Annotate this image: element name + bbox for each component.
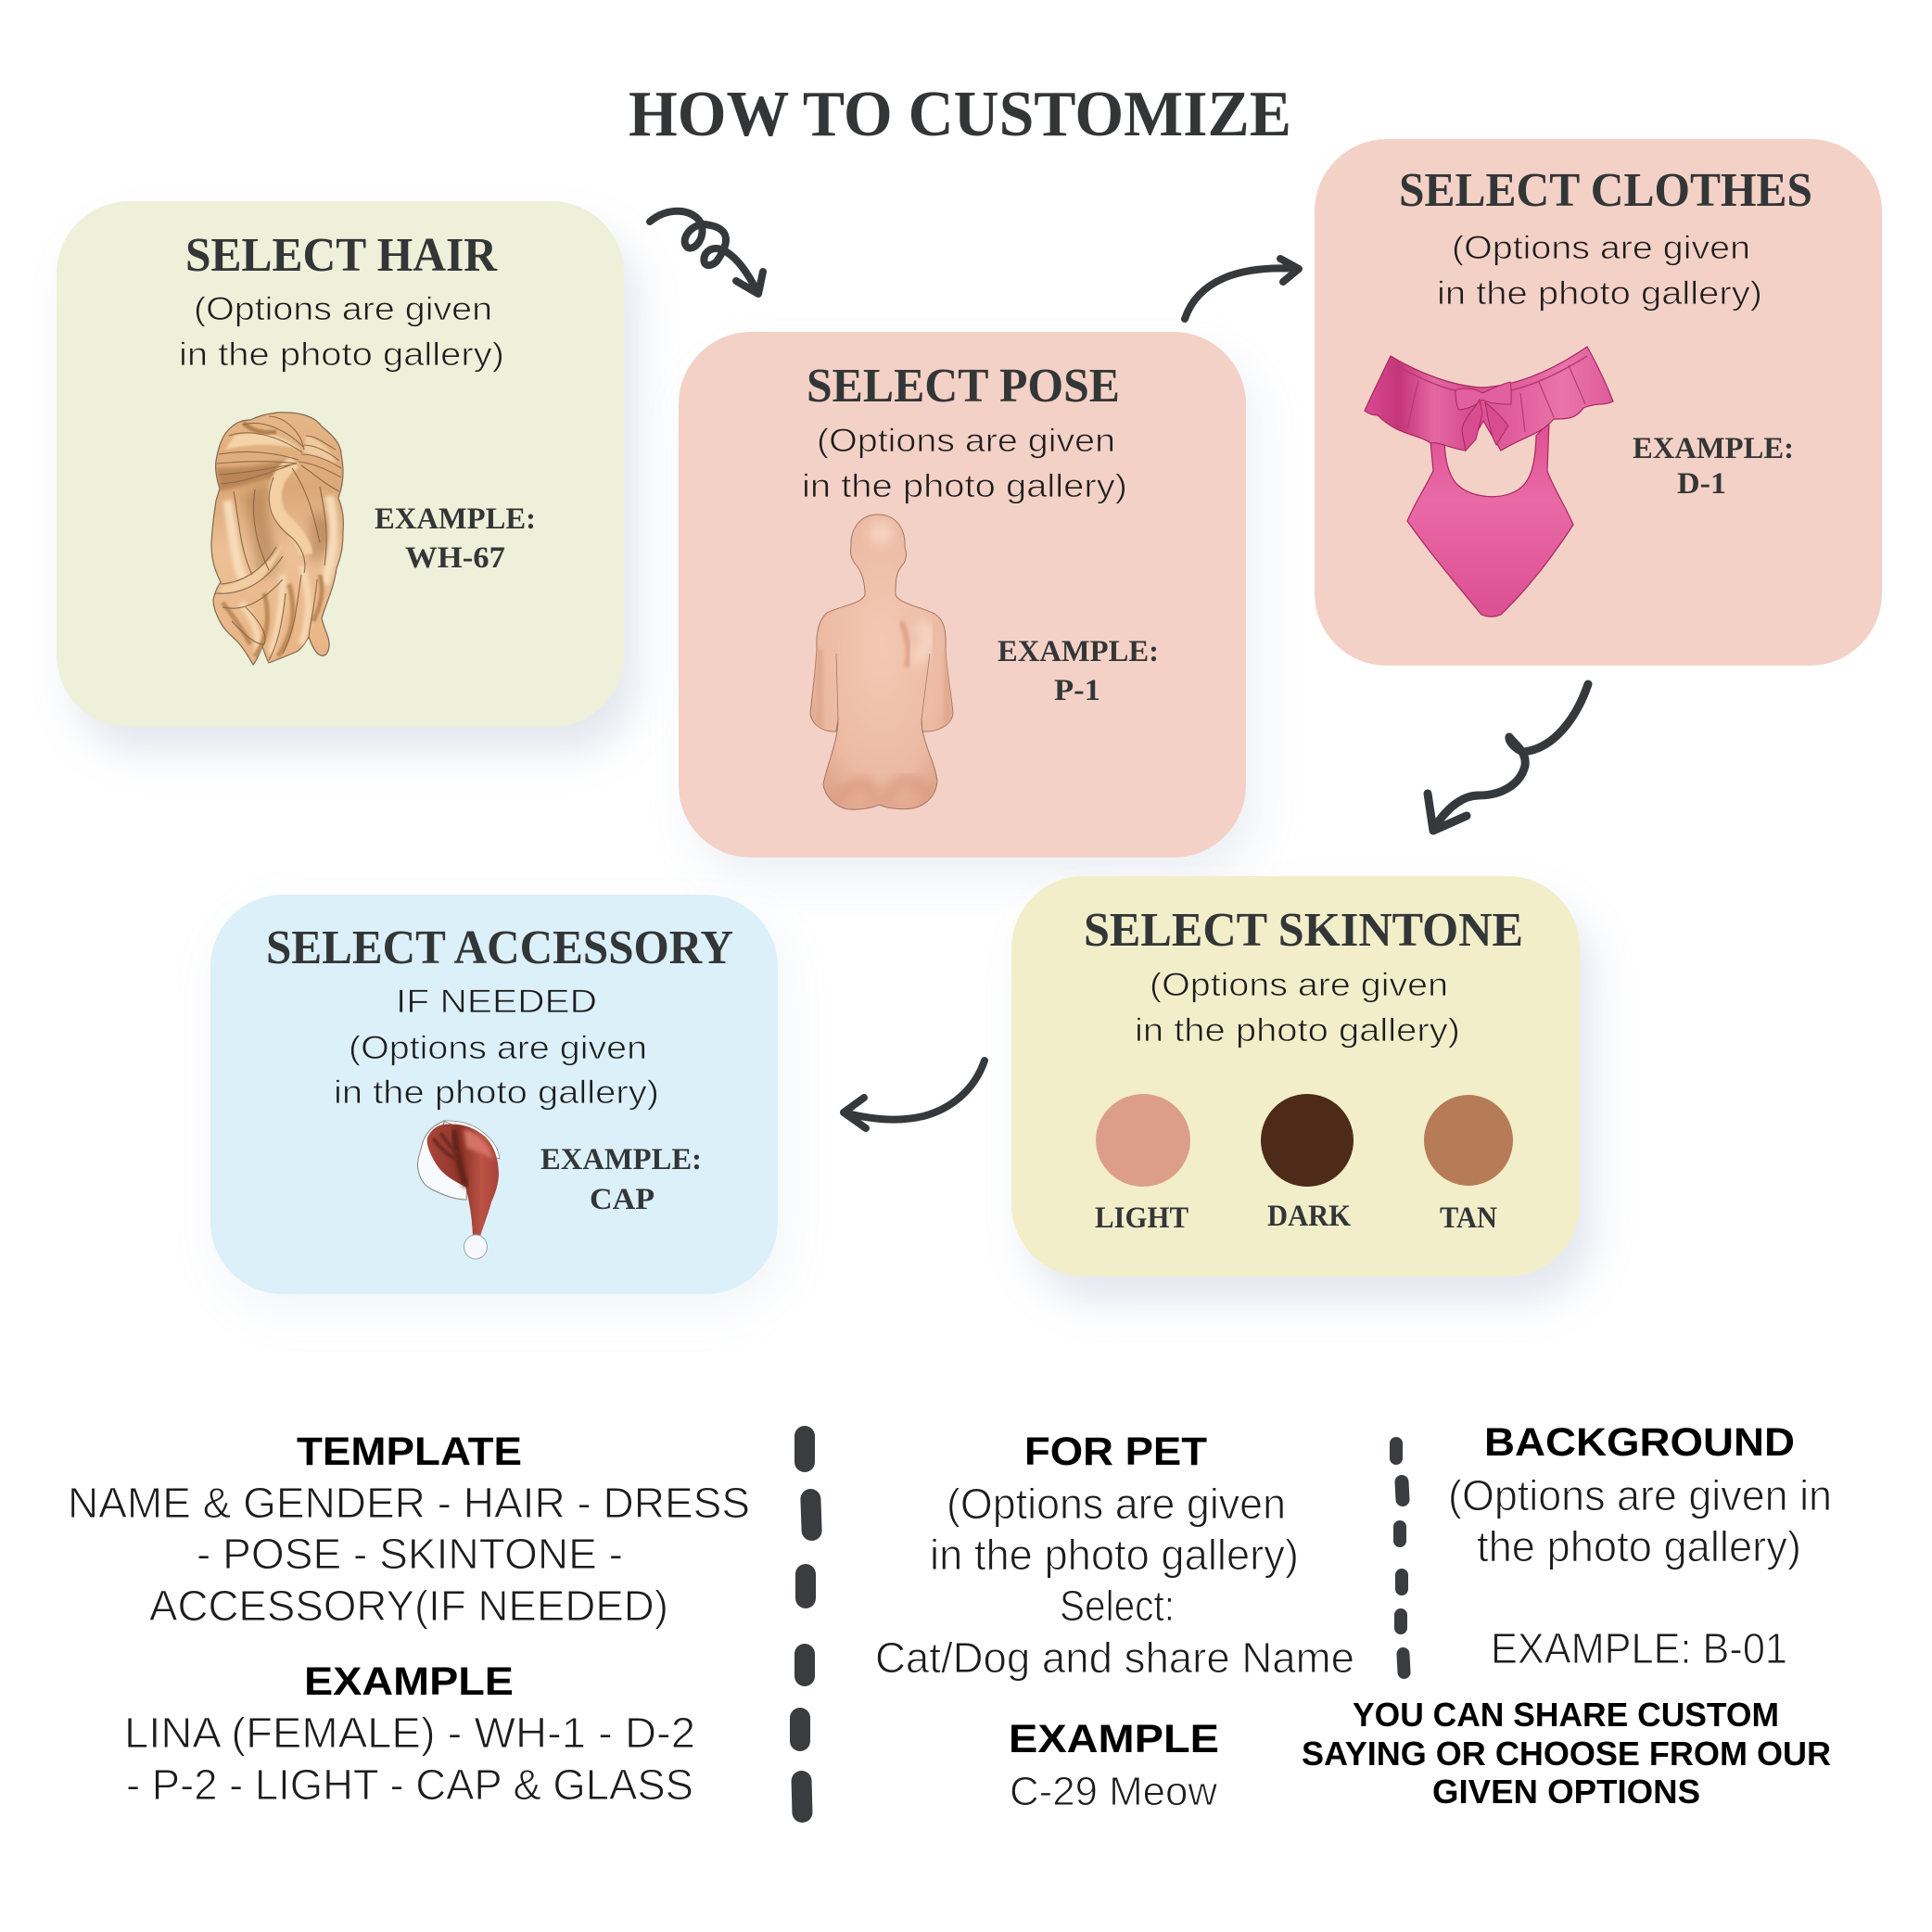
text: clothes options note: in the photo gallery): [1437, 275, 1762, 311]
arrow: clothes to skintone: [1428, 684, 1588, 831]
label: accessory example: CAP: [590, 1183, 655, 1216]
text block: for pet: Select:: [1060, 1582, 1175, 1630]
text: hair options note: [179, 291, 504, 373]
callout: custom saying: SAYING OR CHOOSE FROM OUR: [1302, 1735, 1831, 1773]
arrow: hair to pose: [650, 211, 763, 294]
text block: template: NAME & GENDER - HAIR - DRESS: [68, 1479, 750, 1527]
label: hair example: EXAMPLE:: [375, 502, 536, 536]
icon: blonde hair illustration: [211, 413, 343, 665]
text block: for pet: FOR PET: [1024, 1430, 1207, 1474]
swatch: tan: [1424, 1095, 1513, 1235]
panel: select skintone: [1011, 876, 1580, 1277]
text: clothes options note: [1437, 230, 1762, 311]
heading: select hair: SELECT HAIR: [185, 229, 498, 282]
swatch: tan: TAN: [1440, 1201, 1497, 1235]
text block: background: (Options are given in: [1448, 1471, 1832, 1519]
divider: left dashes: [790, 1426, 822, 1823]
label: accessory example: [540, 1143, 702, 1216]
swatch: light: [1095, 1094, 1190, 1235]
swatch: dark: DARK: [1267, 1200, 1351, 1233]
icon: seated body from behind: [810, 515, 953, 809]
text block: background: BACKGROUND: [1484, 1420, 1795, 1465]
text block: for pet: (Options are given: [947, 1480, 1286, 1528]
label: clothes example: D-1: [1677, 467, 1726, 501]
swatch: dark: [1261, 1094, 1354, 1233]
text block: for pet: [875, 1430, 1354, 1814]
text: pose options note: in the photo gallery): [802, 468, 1127, 504]
divider: right dashes: [1390, 1437, 1411, 1679]
text: clothes options note: (Options are given: [1452, 230, 1750, 266]
heading: select accessory: SELECT ACCESSORY: [266, 922, 733, 974]
text block: template: ACCESSORY(IF NEEDED): [149, 1582, 668, 1630]
text block: template: EXAMPLE: [304, 1659, 514, 1704]
label: hair example: [375, 502, 536, 575]
text: hair options note: in the photo gallery): [179, 337, 504, 373]
label: pose example: P-1: [1054, 674, 1100, 707]
text block: template: - P-2 - LIGHT - CAP & GLASS: [126, 1760, 693, 1809]
panel: select accessory: [210, 895, 778, 1294]
text block: for pet: in the photo gallery): [930, 1531, 1299, 1579]
fine hair strands: [217, 416, 341, 491]
text block: for pet: EXAMPLE: [1009, 1717, 1219, 1761]
text: pose options note: [802, 423, 1127, 504]
text block: for pet: C-29 Meow: [1010, 1769, 1217, 1814]
text: skintone options note: [1135, 967, 1460, 1049]
text: accessory options note: (Options are given: [349, 1030, 647, 1066]
callout: custom saying: YOU CAN SHARE CUSTOM: [1353, 1696, 1779, 1734]
label: clothes example: EXAMPLE:: [1633, 432, 1794, 465]
text block: background: EXAMPLE: B-01: [1491, 1624, 1787, 1672]
text block: template: - POSE - SKINTONE -: [197, 1530, 623, 1578]
text block: template: [68, 1430, 750, 1809]
panel: select hair: [57, 201, 624, 727]
text: accessory options note: in the photo gallery): [334, 1074, 659, 1111]
icon: pink ruffled swimsuit: [1365, 347, 1613, 616]
arrow: skintone to accessory: [844, 1061, 985, 1128]
text: accessory options note: [334, 984, 659, 1111]
label: clothes example: [1633, 432, 1794, 501]
swatch: light: LIGHT: [1095, 1201, 1188, 1235]
text: hair options note: (Options are given: [194, 291, 492, 327]
label: pose example: [998, 635, 1159, 707]
heading: select skintone: SELECT SKINTONE: [1084, 904, 1523, 957]
text: skintone options note: (Options are given: [1150, 967, 1448, 1003]
label: hair example: WH-67: [405, 541, 505, 575]
heading: select clothes: SELECT CLOTHES: [1399, 164, 1812, 217]
heading: select pose: SELECT POSE: [807, 360, 1120, 413]
text block: template: LINA (FEMALE) - WH-1 - D-2: [124, 1709, 695, 1757]
icon: santa hat: [417, 1121, 500, 1259]
label: accessory example: EXAMPLE:: [540, 1143, 702, 1176]
callout: custom saying: GIVEN OPTIONS: [1432, 1773, 1700, 1811]
text: skintone options note: in the photo gallery): [1135, 1012, 1460, 1049]
text block: background: the photo gallery): [1477, 1522, 1801, 1570]
panel: select pose: [679, 332, 1246, 858]
label: pose example: EXAMPLE:: [998, 635, 1159, 668]
text block: template: TEMPLATE: [297, 1430, 522, 1474]
text block: background: [1448, 1420, 1832, 1672]
text: pose options note: (Options are given: [817, 423, 1115, 459]
text: accessory options note: IF NEEDED: [396, 984, 597, 1020]
title: HOW TO CUSTOMIZE: [629, 79, 1291, 150]
callout: custom saying: [1302, 1696, 1831, 1811]
text block: for pet: Cat/Dog and share Name: [875, 1633, 1354, 1682]
arrow: pose to clothes: [1185, 259, 1299, 319]
soft shading of the half-up section: [216, 459, 292, 491]
panel: select clothes: [1315, 139, 1882, 666]
